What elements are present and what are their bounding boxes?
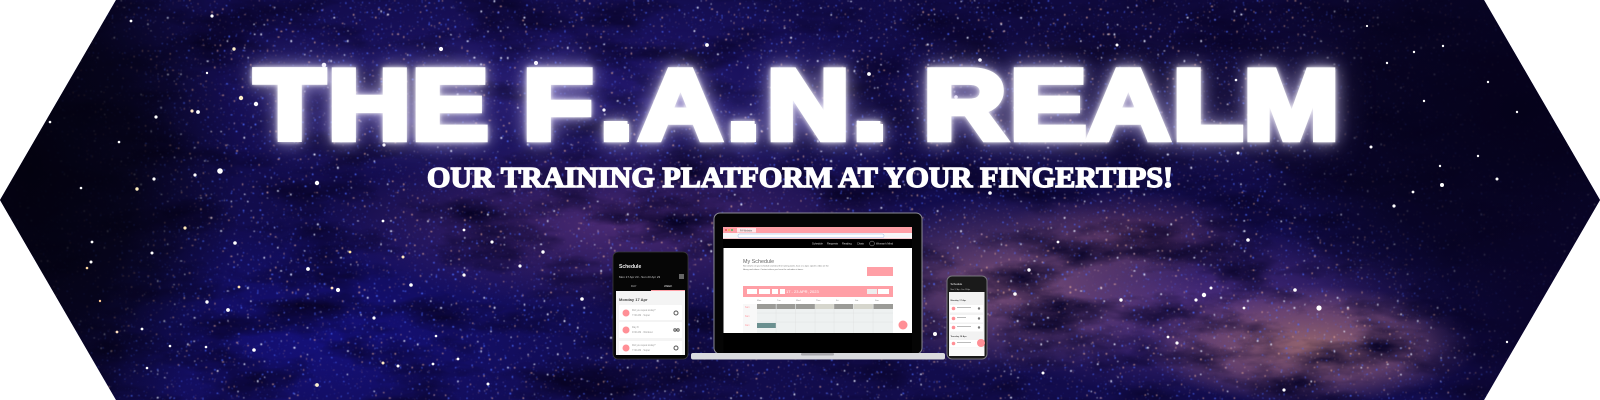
subtitle: OUR TRAINING PLATFORM AT YOUR FINGERTIPS!: [427, 163, 1173, 194]
tablet cards: 9:30 AM · Workout: [632, 331, 653, 334]
phone mockup: Schedule: [950, 282, 963, 286]
phone mockup: Tuesday 18 Apr: [950, 335, 967, 338]
schedule page: 9am: [745, 324, 750, 327]
tablet cards: [619, 305, 682, 355]
phone mockup: Mon 17 Apr - Sun 23 Apr: [950, 288, 971, 291]
tablet cards: Did you squat today?: [632, 309, 656, 312]
schedule page: 8am: [745, 315, 750, 318]
schedule page: [724, 248, 912, 353]
phone mockup: [947, 276, 987, 359]
site navigation: Chats: [857, 242, 864, 246]
title: THE F.A.N. REALM: [255, 49, 1339, 160]
schedule page: See what's on your schedule and what the training week, hour or a topic specific video on the: [743, 264, 829, 268]
tablet cards: 7:30 AM · Super: [632, 314, 650, 317]
site navigation: [723, 239, 912, 248]
tablet mockup: Schedule: [619, 264, 641, 270]
schedule page: Tue: [777, 300, 781, 302]
schedule page: Fri: [836, 299, 839, 302]
schedule page: Sat: [855, 299, 859, 302]
tablet cards: Day 8: [632, 326, 639, 329]
site navigation: Reading: [842, 242, 852, 246]
schedule page: Sun: [875, 300, 880, 302]
site navigation: Requests: [827, 242, 839, 246]
tablet mockup: DAY: [631, 284, 637, 288]
schedule page: Wed: [796, 300, 801, 302]
site navigation: Schedule: [812, 242, 823, 246]
schedule page: 17 - 23 APR, 2023: [786, 289, 819, 294]
tablet cards: Did you squat today?: [632, 344, 656, 347]
schedule page: Thur: [816, 299, 821, 302]
schedule page: My Schedule: [743, 259, 774, 265]
browser bar: FA Website: [740, 230, 753, 233]
tablet mockup: WEEK: [664, 284, 672, 288]
site navigation: Woman's Mind: [876, 242, 894, 246]
tablet mockup: Mon 17 Apr 23 - Sun 23 Apr 23: [619, 275, 661, 279]
schedule page: library and videos. Contact others you have the calendar at times.: [743, 268, 804, 271]
phone cards: [949, 305, 985, 356]
laptop mockup: [691, 213, 945, 360]
tablet cards: 7:30 AM · Super: [632, 349, 650, 352]
schedule page: Mon: [757, 300, 762, 302]
schedule page: 6am: [745, 306, 750, 309]
laptop base: [691, 353, 945, 360]
browser bar: [723, 227, 912, 239]
tablet mockup: [613, 252, 688, 359]
phone mockup: Monday 17 Apr: [950, 299, 966, 302]
tablet mockup: Monday 17 Apr: [619, 297, 648, 302]
